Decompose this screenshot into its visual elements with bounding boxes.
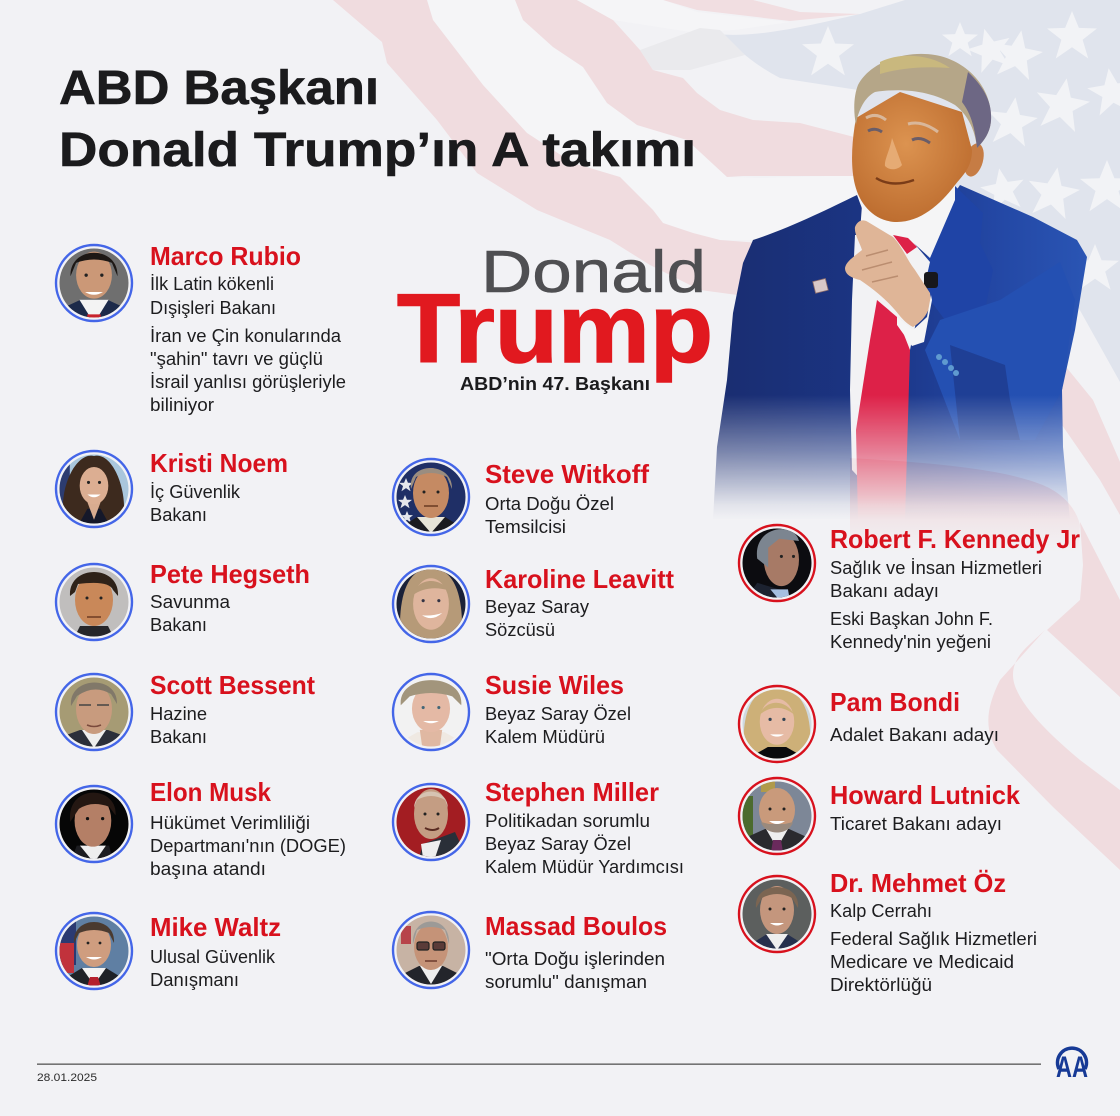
portrait: Robert F. Kennedy Jr (737, 523, 817, 603)
name: Massad Boulos (485, 911, 667, 941)
jacket (713, 185, 1087, 520)
icon: Anadolu Agency logo: AA (1056, 1051, 1088, 1084)
portrait: Pam Bondi (736, 683, 818, 765)
name: Steve Witkoff (485, 459, 649, 489)
portrait: Steve Witkoff (393, 459, 469, 535)
name: Robert F. Kennedy Jr (830, 524, 1080, 554)
description: Sağlık ve İnsan Hizmetleri (830, 558, 1042, 578)
description: Kalem Müdürü (485, 727, 605, 747)
description: Savunma (150, 592, 231, 612)
description: İlk Latin kökenli (150, 274, 274, 294)
name: Elon Musk (150, 777, 271, 807)
description: Sözcüsü (485, 620, 555, 640)
cuff (897, 295, 932, 346)
photo: Donald Trump (713, 54, 1087, 520)
name: Pete Hegseth (150, 559, 310, 589)
portrait: Scott Bessent (56, 674, 132, 750)
description: Kennedy'nin yeğeni (830, 632, 991, 652)
member: Massad Boulos (393, 911, 667, 992)
hair (854, 54, 991, 148)
description (150, 482, 241, 525)
name: Pam Bondi (830, 687, 960, 717)
name: Karoline Leavitt (485, 564, 674, 594)
member: Howard Lutnick (739, 778, 1021, 854)
portrait: Stephen Miller (393, 784, 469, 860)
description (150, 592, 231, 635)
description: Orta Doğu Özel (485, 494, 614, 514)
title: Donald Trump’ın A takımı (59, 124, 696, 177)
microphone (924, 272, 938, 288)
description (485, 597, 589, 640)
description: Bakanı (150, 727, 207, 747)
description (485, 811, 684, 877)
pocket pin (813, 278, 828, 293)
face details (866, 115, 938, 132)
description (830, 558, 1042, 652)
member: Susie Wiles (391, 670, 631, 752)
description: sorumlu" danışman (485, 972, 647, 992)
member: Scott Bessent (56, 670, 315, 750)
description: Direktörlüğü (830, 975, 932, 995)
sleeve buttons (936, 354, 959, 376)
description: Politikadan sorumlu (485, 811, 650, 831)
description: Medicare ve Medicaid (830, 952, 1014, 972)
name: Scott Bessent (150, 670, 315, 700)
name: Mike Waltz (150, 912, 281, 942)
portrait: Howard Lutnick (739, 778, 815, 854)
title: ABD Başkanı (59, 62, 379, 115)
member: Dr. Mehmet Öz (739, 868, 1037, 995)
head (852, 92, 972, 222)
member: Karoline Leavitt (391, 564, 674, 644)
description: Hükümet Verimliliği (150, 813, 310, 833)
name lockup: Donald Trump: Donald (481, 239, 706, 305)
description (150, 813, 346, 879)
description: başına atandı (150, 859, 266, 879)
name lockup: Donald Trump (397, 239, 713, 394)
tie (856, 300, 910, 520)
description: Ulusal Güvenlik (150, 947, 276, 967)
description: Federal Sağlık Hizmetleri (830, 929, 1037, 949)
member: Pete Hegseth (56, 559, 310, 640)
description (150, 274, 346, 415)
name: Marco Rubio (150, 241, 301, 271)
description: İsrail yanlısı görüşleriyle (150, 372, 346, 392)
portrait: Mike Waltz (56, 913, 132, 989)
description: Departmanı'nın (DOGE) (150, 836, 346, 856)
description: Ticaret Bakanı adayı (830, 814, 1002, 834)
description (150, 947, 276, 990)
name: Howard Lutnick (830, 780, 1021, 810)
description (485, 704, 631, 747)
name lockup: Donald Trump: Trump (397, 274, 713, 383)
portrait: Susie Wiles (391, 672, 471, 752)
portrait: Karoline Leavitt (391, 564, 471, 644)
portrait: Massad Boulos (393, 912, 469, 988)
portrait: Marco Rubio (54, 243, 134, 323)
description: Bakanı adayı (830, 581, 939, 601)
member: Stephen Miller (393, 777, 684, 877)
name lockup: Donald Trump: ABD’nin 47. Başkanı (460, 373, 650, 394)
description: "şahin" tavrı ve güçlü (150, 349, 323, 369)
description: İran ve Çin konularında (150, 326, 342, 346)
member: Steve Witkoff (393, 459, 649, 537)
name: Susie Wiles (485, 670, 624, 700)
member: Mike Waltz (56, 912, 281, 990)
description (485, 494, 614, 537)
description: Bakanı (150, 615, 207, 635)
description: Beyaz Saray Özel (485, 834, 631, 854)
description: Temsilcisi (485, 517, 566, 537)
description: İç Güvenlik (150, 482, 241, 502)
description: Beyaz Saray Özel (485, 704, 631, 724)
description: "Orta Doğu işlerinden (485, 949, 665, 969)
name: Kristi Noem (150, 448, 288, 478)
description: Beyaz Saray (485, 597, 589, 617)
description: Dışişleri Bakanı (150, 298, 276, 318)
description: biliniyor (150, 395, 214, 415)
member: Kristi Noem (54, 448, 288, 529)
portrait: Elon Musk (55, 785, 133, 863)
name: Dr. Mehmet Öz (830, 868, 1006, 898)
neck collar (860, 185, 955, 258)
description: Adalet Bakanı adayı (830, 725, 999, 745)
member: Elon Musk (55, 777, 346, 879)
description: Hazine (150, 704, 207, 724)
shirt (850, 235, 930, 500)
description (830, 901, 1037, 995)
description: Eski Başkan John F. (830, 609, 993, 629)
member: Robert F. Kennedy Jr (737, 523, 1080, 652)
title (59, 62, 696, 177)
description (485, 949, 665, 992)
description: Kalp Cerrahı (830, 901, 932, 921)
portrait: Dr. Mehmet Öz (739, 876, 815, 952)
stars on flag (802, 11, 1120, 290)
member: Marco Rubio (54, 241, 346, 415)
icon: Anadolu Agency logo (1056, 1048, 1088, 1084)
description: Danışmanı (150, 970, 239, 990)
ear (961, 141, 987, 179)
description: Bakanı (150, 505, 207, 525)
portrait: Kristi Noem (54, 449, 134, 529)
member: Pam Bondi (736, 683, 999, 765)
description: Kalem Müdür Yardımcısı (485, 857, 684, 877)
portrait: Pete Hegseth (56, 564, 132, 640)
name: Stephen Miller (485, 777, 659, 807)
pointing hand (845, 220, 930, 327)
date: 28.01.2025 (37, 1072, 97, 1084)
description (150, 704, 207, 747)
flag background (333, 0, 1120, 870)
